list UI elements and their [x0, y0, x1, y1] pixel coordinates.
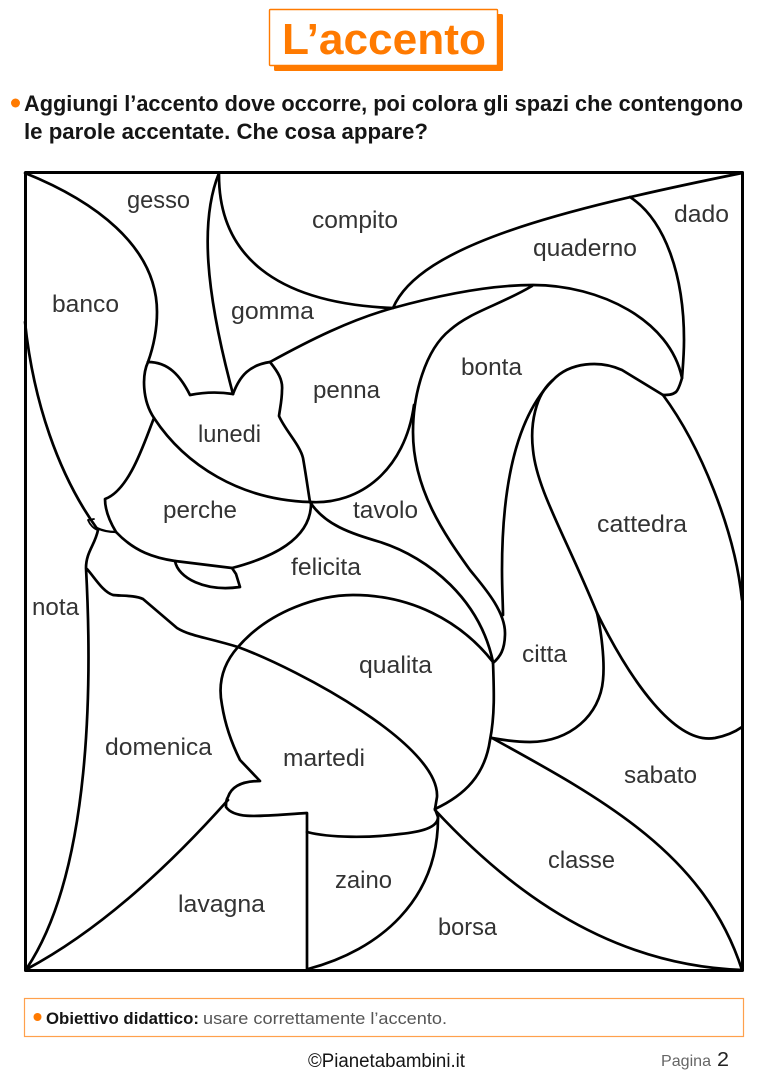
word: zaino: zaino	[335, 867, 392, 894]
word: gesso: gesso	[127, 187, 190, 214]
word: felicita: felicita	[291, 554, 362, 581]
word: sabato: sabato	[624, 762, 697, 789]
footer credit: ©Pianetabambini.it	[308, 1051, 466, 1072]
colouring picture	[25, 172, 742, 970]
instruction text	[11, 91, 743, 144]
word: compito: compito	[312, 207, 398, 234]
objective box: usare correttamente l’accento.	[203, 1009, 447, 1028]
word: qualita: qualita	[359, 652, 433, 679]
word: lavagna: lavagna	[178, 891, 266, 918]
word: penna: penna	[313, 377, 381, 404]
frame	[26, 172, 742, 970]
word: borsa: borsa	[438, 914, 498, 941]
instruction text: le parole accentate. Che cosa appare?	[24, 119, 428, 144]
shape outlines	[25, 173, 742, 970]
word: lunedi: lunedi	[198, 421, 261, 448]
word: citta: citta	[522, 641, 568, 668]
word: martedi: martedi	[283, 745, 365, 772]
word: perche: perche	[163, 497, 237, 524]
title	[270, 10, 503, 71]
word: classe: classe	[548, 847, 615, 874]
page number	[661, 1049, 729, 1071]
word: gomma: gomma	[231, 298, 315, 325]
page number: Pagina	[661, 1053, 711, 1070]
objective box	[24, 998, 744, 1036]
word: banco: banco	[52, 291, 119, 318]
word: quaderno: quaderno	[533, 235, 637, 262]
objective box: Obiettivo didattico:	[46, 1009, 199, 1028]
instruction text: Aggiungi l’accento dove occorre, poi colora gli spazi che contengono	[24, 91, 743, 116]
word: nota: nota	[32, 594, 80, 621]
word: bonta: bonta	[461, 354, 523, 381]
word: domenica: domenica	[105, 734, 213, 761]
page number: 2	[717, 1049, 729, 1071]
title: L’accento	[282, 15, 486, 64]
word: cattedra: cattedra	[597, 511, 688, 538]
word: dado: dado	[674, 201, 729, 228]
word: tavolo: tavolo	[353, 497, 418, 524]
